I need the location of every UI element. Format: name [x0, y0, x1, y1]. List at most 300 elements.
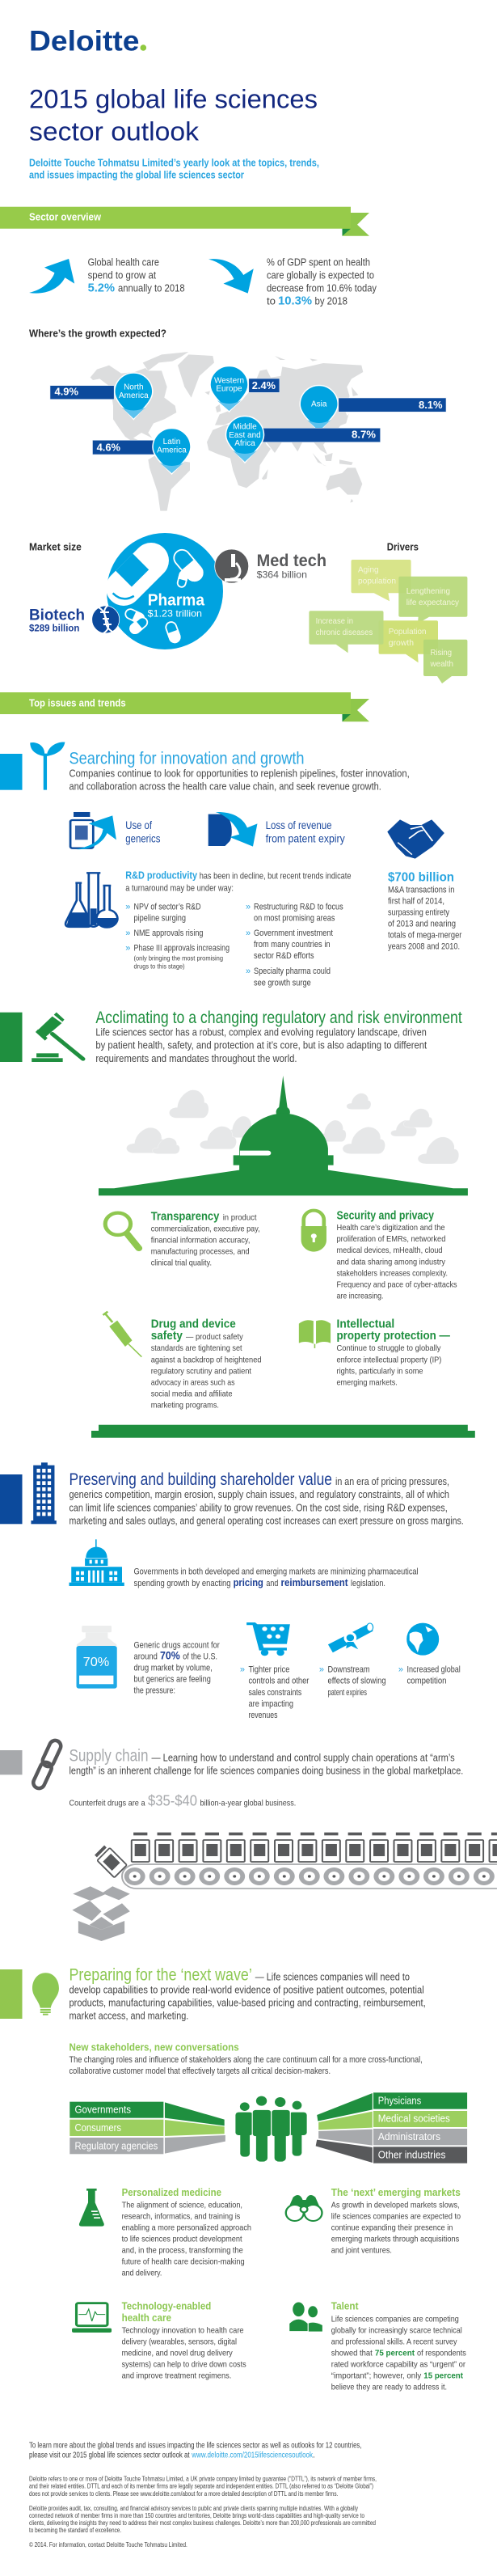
text: R&D productivity: R&D productivity — [125, 869, 198, 882]
label: patent expiry: Loss of revenue — [266, 819, 332, 831]
icon: patent document with arrow — [208, 812, 257, 847]
list: pressures on generics: Increased global — [407, 1665, 461, 1675]
text: learn more: please visit our 2015 global life sciences sector outlook at — [29, 2451, 190, 2460]
text: government pricing: Governments in both developed and emerging markets are minimizing pharmaceutical — [134, 1567, 419, 1577]
diagram: stakeholders left: Governments — [74, 2104, 131, 2116]
bubble: chronic diseases: Increase in — [316, 616, 353, 626]
text: transparency: manufacturing processes, and — [151, 1246, 250, 1256]
icon: DNA circle — [92, 606, 120, 633]
bar: Middle East and Africa 8.7%: 8.7% — [352, 429, 376, 441]
stat: GDP share: % of GDP spent on health — [267, 256, 370, 268]
heading and text: shareholder value: generics competition, margin erosion, supply chain issues, and regulatory constraints, all of which — [69, 1489, 449, 1500]
stat: health care spend: annually to 2018 — [118, 282, 185, 294]
label: med tech — [257, 552, 326, 580]
list: R&D trends left: NME approvals rising — [134, 928, 203, 938]
text: new stakeholders — [69, 2041, 423, 2076]
label: use of generics: generics — [125, 833, 161, 845]
heading and text: next wave: develop capabilities to provide real-world evidence of positive patient outcomes, potential — [69, 1984, 424, 1995]
list: pressures on generics — [240, 1665, 461, 1720]
icon: laptop with heartbeat — [72, 2303, 112, 2333]
list: pressures on generics: » — [319, 1665, 324, 1675]
bubble: aging population — [351, 560, 411, 601]
text: intellectual property: Intellectual — [336, 1318, 394, 1331]
text: technology-enabled: medicine, and novel drug delivery — [122, 2348, 233, 2358]
icon: binoculars — [286, 2195, 322, 2221]
text: personalized medicine: and delivery. — [122, 2269, 162, 2278]
text: new stakeholders: collaborative customer model that effectively targets all critical decision-makers. — [69, 2066, 331, 2076]
icon: globe — [406, 1623, 439, 1656]
list: R&D trends right: on most promising areas — [254, 914, 335, 924]
list: R&D trends left: pipeline surging — [134, 914, 186, 924]
text: security and privacy: and data sharing among industry — [336, 1257, 446, 1267]
text: personalized medicine: research, informatics, and training is — [122, 2211, 240, 2221]
text: drug and device safety: safety — [151, 1330, 183, 1343]
label: biotech: $289 billion — [29, 623, 79, 634]
stat: GDP share: by 2018 — [315, 296, 347, 307]
stat: M&A: M&A transactions in — [388, 885, 454, 895]
list: pressures on generics: are impacting — [249, 1699, 293, 1709]
bubble: population growth: growth — [389, 638, 414, 648]
capitol dome illustration — [99, 1076, 468, 1195]
list: pressures on generics: Tighter price — [249, 1665, 289, 1675]
bar: Latin America 4.6%: 4.6% — [97, 441, 120, 453]
text: security and privacy: proliferation of EMRs, networked — [336, 1234, 446, 1244]
heading: drivers: Drivers — [387, 542, 419, 553]
text: security and privacy: are increasing. — [336, 1291, 383, 1301]
text: legal: connected network of member firms in more than 150 countries and territories, Deloitte brings world-class capabilities and high-quality service to — [29, 2512, 364, 2519]
pin: Latin America: Latin — [163, 438, 180, 446]
heading and text: next wave: products, manufacturing capabilities, value-based pricing and contracting, reimbursement, — [69, 1997, 426, 2008]
text: learn more: To learn more about the global trends and issues impacting the life sciences sector as well as outlooks for 12 countries, — [29, 2442, 362, 2451]
pin: Western Europe — [210, 366, 248, 412]
text: counterfeit: Counterfeit drugs are a — [69, 1798, 145, 1808]
banner: sector overview — [0, 207, 369, 236]
list: pressures on generics: controls and other — [249, 1677, 310, 1686]
label: patent expiry: from patent expiry — [266, 833, 345, 845]
stat: GDP share: care globally is expected to — [267, 269, 374, 281]
text: talent: of respondents — [417, 2348, 466, 2358]
text: government pricing: legislation. — [351, 1579, 385, 1588]
text: generic drugs: but generics are feeling — [134, 1675, 211, 1685]
stat: GDP share — [267, 256, 377, 308]
label: med tech: Med tech — [257, 552, 326, 570]
text: drug and device safety: marketing programs. — [151, 1400, 219, 1410]
pin: North America: North — [124, 383, 144, 392]
stat: M&A: surpassing entirety — [388, 908, 449, 918]
pin: Latin America — [153, 428, 191, 474]
text: transparency — [151, 1210, 260, 1268]
text: generic drugs — [134, 1640, 220, 1696]
icon: light bulb — [32, 1973, 59, 2016]
text: talent: rated workforce capability as “urgent” or — [331, 2359, 465, 2369]
heading: searching for innovation: Searching for innovation and growth — [69, 749, 304, 768]
text: learn more: . — [313, 2451, 315, 2460]
text: technology-enabled: Technology-enabled — [122, 2300, 211, 2312]
list: pressures on generics: patent expiries — [328, 1688, 367, 1698]
label: med tech: $364 billion — [257, 569, 307, 580]
text: technology-enabled — [122, 2300, 246, 2380]
icon: two people — [289, 2302, 322, 2332]
subtitle — [29, 158, 319, 181]
section marker: regulatory — [0, 1013, 23, 1062]
panel: pharma circle — [99, 533, 223, 649]
text: R&D productivity — [125, 869, 352, 893]
list: pressures on generics: revenues — [249, 1711, 278, 1720]
text: next emerging markets: As growth in developed markets slows, — [331, 2200, 460, 2210]
list: R&D trends right: » — [246, 967, 251, 976]
list: R&D trends right: from many countries in — [254, 940, 331, 950]
bar: North America 4.9%: 4.9% — [55, 386, 78, 398]
text: talent: 75 percent — [375, 2348, 415, 2358]
text: technology-enabled: health care — [122, 2312, 171, 2324]
list: R&D trends right — [246, 902, 343, 988]
text: legal: and their related entities. DTTL and each of its member firms are legally separate and independent entities. DTTL (also referred to as “Deloitte Global”) — [29, 2483, 373, 2490]
text: generic drugs: of the U.S. — [183, 1652, 217, 1661]
logo: Deloitte — [29, 24, 139, 57]
diagram: stakeholders left: Regulatory agencies — [74, 2140, 158, 2151]
bubble: population growth — [379, 620, 438, 662]
icon: generics bottle with arrow — [70, 812, 116, 849]
text: counterfeit: $35-$40 — [148, 1792, 197, 1808]
text: security and privacy — [336, 1209, 457, 1301]
capitol base — [91, 1425, 475, 1438]
list: R&D trends left: » — [125, 944, 130, 954]
text: drug and device safety: Drug and device — [151, 1318, 236, 1331]
text: government pricing: pricing — [234, 1576, 263, 1588]
text: generic drugs: around — [134, 1652, 158, 1661]
text: legal: to becoming the standard of excellence. — [29, 2527, 121, 2534]
text: talent: “important”; however, only — [331, 2371, 422, 2380]
text: next emerging markets: The ‘next’ emerging markets — [331, 2186, 461, 2198]
stat: M&A: years 2008 and 2010. — [388, 942, 460, 952]
heading and text: supply chain: Supply chain — [69, 1746, 149, 1765]
icon: padlock — [301, 1211, 326, 1252]
text: intellectual property: emerging markets. — [336, 1377, 398, 1387]
text: talent: and professional skills. A recent survey — [331, 2337, 457, 2346]
text: generic drugs: the pressure: — [134, 1686, 175, 1696]
text: legal: © 2014. For information, contact Deloitte Touche Tohmatsu Limited. — [29, 2541, 187, 2549]
stat: health care spend: Global health care — [88, 256, 159, 268]
bar: Latin America 4.6% — [92, 440, 155, 455]
icon: microscope circle — [215, 549, 249, 583]
pin: Asia: Asia — [311, 400, 327, 409]
icon: tilted bottle — [93, 1844, 127, 1878]
text: regulatory body: requirements and mandates throughout the world. — [95, 1053, 297, 1064]
list: R&D trends left: NPV of sector’s R&D — [134, 902, 201, 912]
list: R&D trends left — [125, 902, 230, 971]
stat: health care spend: 5.2% — [88, 281, 115, 294]
label: pharma: Pharma — [148, 591, 205, 609]
text: talent: Talent — [331, 2300, 359, 2312]
label: use of generics — [125, 819, 161, 845]
text: legal: Deloitte provides audit, tax, consulting, and financial advisory services to public and private clients spanning multiple industries. With a globally — [29, 2505, 358, 2512]
text: personalized medicine: future of health care decision-making — [122, 2257, 245, 2267]
pin: Middle East and Africa: Africa — [234, 439, 255, 448]
heading and text: shareholder value — [69, 1470, 464, 1526]
diagram: stakeholders right: Administrators — [378, 2131, 440, 2142]
text: talent: globally for increasingly scarce technical — [331, 2326, 462, 2336]
heading and text: shareholder value: can limit life sciences companies’ ability to grow revenues. On the cost side, rising R&D expenses, — [69, 1502, 448, 1513]
text: technology-enabled: Technology innovation to health care — [122, 2325, 244, 2335]
icon: gavel — [32, 1013, 83, 1062]
drivers speech bubbles — [309, 560, 467, 683]
text: innovation body — [69, 768, 410, 793]
list: pressures on generics: effects of slowing — [328, 1677, 386, 1686]
text: drug and device safety — [151, 1318, 262, 1410]
label: pharma — [148, 591, 205, 620]
text: talent: 15 percent — [423, 2371, 463, 2380]
diagram: stakeholders left: Consumers — [74, 2122, 121, 2134]
icon: syringe — [103, 1312, 141, 1357]
text: transparency: clinical trial quality. — [151, 1258, 212, 1268]
label: use of generics: Use of — [125, 819, 152, 831]
bubble: rising wealth: wealth — [430, 659, 453, 669]
icon: book — [299, 1320, 331, 1348]
diagram: stakeholders right: Medical societies — [378, 2113, 450, 2125]
text: drug and device safety: advocacy in areas such as — [151, 1377, 235, 1387]
stat: M&A: totals of mega-merger — [388, 931, 462, 941]
text: talent: showed that — [331, 2348, 373, 2358]
list: R&D trends right: Government investment — [254, 928, 333, 938]
text: learn more: www.deloitte.com/2015lifesciencesoutlook — [191, 2451, 314, 2460]
banner: top issues: Top issues and trends — [29, 698, 126, 709]
text: legal: clients, delivering the insights they need to address their most complex business challenges. Deloitte’s more than 200,000 professionals are committed — [29, 2519, 376, 2527]
icon: government building — [69, 1539, 124, 1586]
heading and text: supply chain: — Learning how to understand and control supply chain operations at “arm’s — [152, 1752, 455, 1763]
label: biotech — [29, 607, 85, 634]
icon: small capsules — [124, 547, 206, 644]
list: R&D trends right: Restructuring R&D to focus — [254, 902, 343, 912]
text: personalized medicine: to life sciences product development — [122, 2235, 242, 2244]
text: talent: believe they are ready to address it. — [331, 2383, 447, 2392]
pin: Middle East and Africa: East and — [229, 431, 261, 440]
list: pressures on generics: » — [398, 1665, 403, 1675]
text: intellectual property: property protection — — [336, 1330, 450, 1343]
icon: lab flasks — [65, 873, 117, 928]
bubble: lengthening life expectancy — [398, 577, 467, 624]
text: personalized medicine: The alignment of science, education, — [122, 2200, 242, 2210]
bubble: chronic diseases: chronic diseases — [316, 628, 373, 637]
icon: shopping cart — [246, 1622, 290, 1656]
stat: GDP share: decrease from 10.6% today — [267, 282, 377, 294]
list: pressures on generics: » — [240, 1665, 245, 1675]
text: drug and device safety: regulatory scrutiny and patient — [151, 1366, 251, 1376]
text: personalized medicine: and, in the process, transforming the — [122, 2246, 243, 2256]
text: drug and device safety: — product safety — [186, 1332, 243, 1342]
text: learn more — [29, 2442, 362, 2460]
title — [29, 84, 318, 146]
bar: North America 4.9% — [50, 386, 114, 400]
icon: down arrow — [208, 259, 254, 294]
text: regulatory body — [95, 1027, 428, 1064]
stat: health care spend — [88, 256, 185, 294]
section marker: innovation — [0, 754, 23, 790]
pin: North America — [115, 373, 153, 419]
heading and text: shareholder value: in an era of pricing pressures, — [335, 1476, 449, 1487]
heading: market size: Market size — [29, 542, 82, 553]
text: transparency: in product — [223, 1212, 257, 1222]
text: next emerging markets: life sciences companies are expected to — [331, 2211, 461, 2221]
title: sector outlook — [29, 116, 200, 146]
diagram: stakeholders right: Other industries — [378, 2149, 445, 2160]
text: R&D productivity: has been in decline, but recent trends indicate — [200, 872, 351, 882]
icon: sprout — [30, 742, 65, 790]
icon: up arrow — [29, 259, 74, 294]
conveyor belt with bottles — [122, 1833, 497, 1889]
bubble: rising wealth: Rising — [430, 648, 452, 658]
list: pressures on generics: sales constraints — [249, 1688, 302, 1698]
text: innovation body: Companies continue to look for opportunities to replenish pipelines, foster innovation, — [69, 768, 410, 780]
text: technology-enabled: and improve treatment regimens. — [122, 2371, 231, 2380]
text: R&D productivity: a turnaround may be under way: — [125, 883, 234, 893]
bubble: population growth: Population — [389, 627, 427, 637]
stat: M&A: of 2013 and nearing — [388, 920, 456, 929]
text: government pricing: spending growth by enacting — [134, 1579, 231, 1588]
text: intellectual property: rights, particularly in some — [336, 1366, 423, 1376]
text: legal: Deloitte refers to one or more of Deloitte Touche Tohmatsu Limited, a UK private company limited by guarantee (“DTTL”), its network of member firms, — [29, 2476, 377, 2483]
diagram: stakeholders right — [316, 2092, 467, 2164]
bar: Western Europe 2.4%: 2.4% — [252, 379, 276, 391]
text: security and privacy: medical devices, mHealth, cloud — [336, 1246, 443, 1255]
label: biotech: Biotech — [29, 607, 85, 624]
bubble: lengthening life expectancy: life expectancy — [406, 598, 460, 607]
text: intellectual property — [336, 1318, 450, 1387]
list: R&D trends left: » — [125, 928, 130, 938]
pin: North America: America — [119, 391, 149, 400]
banner: sector overview: Sector overview — [29, 211, 101, 222]
icon: diploma — [328, 1623, 373, 1652]
subtitle: Deloitte Touche Tohmatsu Limited’s yearly look at the topics, trends, — [29, 158, 319, 169]
list: R&D trends right: Specialty pharma could — [254, 967, 331, 976]
pin: Asia — [300, 385, 338, 432]
text: talent — [331, 2300, 466, 2392]
heading and text: shareholder value: Preserving and building shareholder value — [69, 1470, 332, 1489]
icon: flask — [79, 2189, 104, 2227]
icon: 70% bottle: 70% — [83, 1656, 109, 1669]
heading and text: next wave: — Life sciences companies will need to — [255, 1971, 410, 1982]
bubble: aging population: Aging — [358, 565, 379, 574]
icon: magnifier — [105, 1213, 139, 1248]
label: patent expiry — [266, 819, 345, 845]
icon: 70% bottle — [77, 1626, 117, 1689]
text: security and privacy: Security and privacy — [336, 1209, 434, 1222]
stat: health care spend: spend to grow at — [88, 269, 156, 281]
stat: M&A — [388, 870, 462, 952]
bar: Middle East and Africa 8.7% — [263, 428, 381, 442]
text: security and privacy: Health care’s digitization and the — [336, 1223, 445, 1233]
text: transparency: commercialization, executive pay, — [151, 1224, 260, 1233]
bar: Asia 8.1%: 8.1% — [419, 399, 443, 411]
list: R&D trends left: Phase III approvals increasing — [134, 944, 230, 954]
text: personalized medicine: enabling a more personalized approach — [122, 2223, 251, 2233]
text: intellectual property: enforce intellectual property (IP) — [336, 1355, 441, 1364]
heading and text: supply chain — [69, 1746, 463, 1776]
stat: M&A: $700 billion — [388, 870, 454, 884]
text: generic drugs: Generic drugs account for — [134, 1640, 220, 1650]
icon: office building — [31, 1462, 57, 1524]
bubble: aging population: population — [358, 577, 396, 586]
text: regulatory body: Life sciences sector has a robust, complex and evolving regulatory landscape, driven — [95, 1027, 427, 1038]
text: technology-enabled: systems) can help to drive down costs — [122, 2359, 246, 2369]
bubble: rising wealth — [423, 640, 467, 683]
icon: group of people — [235, 2096, 307, 2162]
heading: growth: Where’s the growth expected? — [29, 328, 166, 340]
text: talent: Life sciences companies are competing — [331, 2315, 459, 2324]
stat: M&A: first half of 2014, — [388, 896, 444, 906]
text: transparency: financial information accuracy, — [151, 1235, 250, 1245]
clouds — [126, 1089, 459, 1164]
subtitle: and issues impacting the global life sciences sector — [29, 170, 244, 181]
bar: Western Europe 2.4% — [249, 379, 280, 392]
text: next emerging markets: and joint ventures. — [331, 2246, 392, 2256]
icon: large capsule — [99, 535, 176, 613]
list: pressures on generics: competition — [407, 1677, 446, 1686]
bubble: lengthening life expectancy: Lengthening — [406, 586, 450, 596]
text: intellectual property: Continue to struggle to globally — [336, 1343, 441, 1353]
section marker: next wave — [0, 1969, 23, 2019]
heading and text: next wave — [69, 1965, 426, 2021]
text: security and privacy: stakeholders increases complexity. — [336, 1268, 448, 1278]
list: pressures on generics: Downstream — [328, 1665, 370, 1675]
pin: Western Europe: Western — [214, 376, 244, 385]
text: personalized medicine: Personalized medicine — [122, 2186, 221, 2198]
text: generic drugs: drug market by volume, — [134, 1664, 213, 1673]
list: R&D trends right: sector R&D efforts — [254, 951, 314, 961]
section marker: shareholder value — [0, 1474, 23, 1524]
title: 2015 global life sciences — [29, 84, 318, 113]
heading and text: next wave: Preparing for the ‘next wave’ — [69, 1965, 252, 1984]
stat: GDP share: 10.3% — [278, 294, 312, 308]
list: R&D trends left: (only bringing the most promising — [134, 954, 223, 962]
pin: Middle East and Africa — [226, 416, 263, 463]
text: legal: does not provide services to clients. Please see www.deloitte.com/about for a more detailed description of DTTL and its member firms. — [29, 2490, 338, 2498]
banner: top issues — [0, 692, 369, 721]
icon: open box — [72, 1886, 130, 1941]
pin: Latin America: America — [157, 446, 187, 455]
icon: chain links — [32, 1739, 63, 1790]
list: R&D trends right: » — [246, 928, 251, 938]
pin: Western Europe: Europe — [216, 385, 242, 394]
text: legal — [29, 2476, 377, 2549]
section marker: supply chain — [0, 1750, 23, 1774]
list: R&D trends right: see growth surge — [254, 978, 311, 988]
text: technology-enabled: delivery (wearables, sensors, digital — [122, 2337, 237, 2346]
text: government pricing: and — [266, 1579, 278, 1588]
text: next emerging markets: continue expanding their presence in — [331, 2223, 453, 2233]
text: counterfeit: billion-a-year global business. — [200, 1798, 296, 1808]
text: counterfeit — [69, 1792, 296, 1808]
world map — [91, 352, 363, 511]
text: new stakeholders: The changing roles and influence of stakeholders along the care continuum call for a more cross-functional, — [69, 2055, 423, 2065]
icon: handshake — [387, 819, 444, 859]
text: regulatory body: by patient health, safety, and protection at it’s core, but is also adapting to different — [95, 1040, 428, 1051]
label: pharma: $1.23 trillion — [148, 608, 202, 620]
text: next emerging markets — [331, 2186, 461, 2256]
text: government pricing: reimbursement — [281, 1576, 348, 1588]
heading and text: next wave: market access, and marketing. — [69, 2010, 188, 2021]
text: personalized medicine — [122, 2186, 251, 2278]
text: generic drugs: 70% — [160, 1649, 180, 1661]
text: security and privacy: Frequency and pace of cyber-attacks — [336, 1280, 457, 1289]
diagram: stakeholders left — [69, 2102, 225, 2154]
list: R&D trends left: » — [125, 902, 130, 912]
text: government pricing — [134, 1567, 419, 1588]
list: R&D trends left: drugs to this stage) — [134, 962, 185, 971]
bar: Asia 8.1% — [339, 398, 446, 412]
list: R&D trends right: » — [246, 902, 251, 912]
text: innovation body: and collaboration across the health care value chain, and seek revenue growth. — [69, 781, 381, 793]
text: drug and device safety: social media and affiliate — [151, 1389, 233, 1398]
